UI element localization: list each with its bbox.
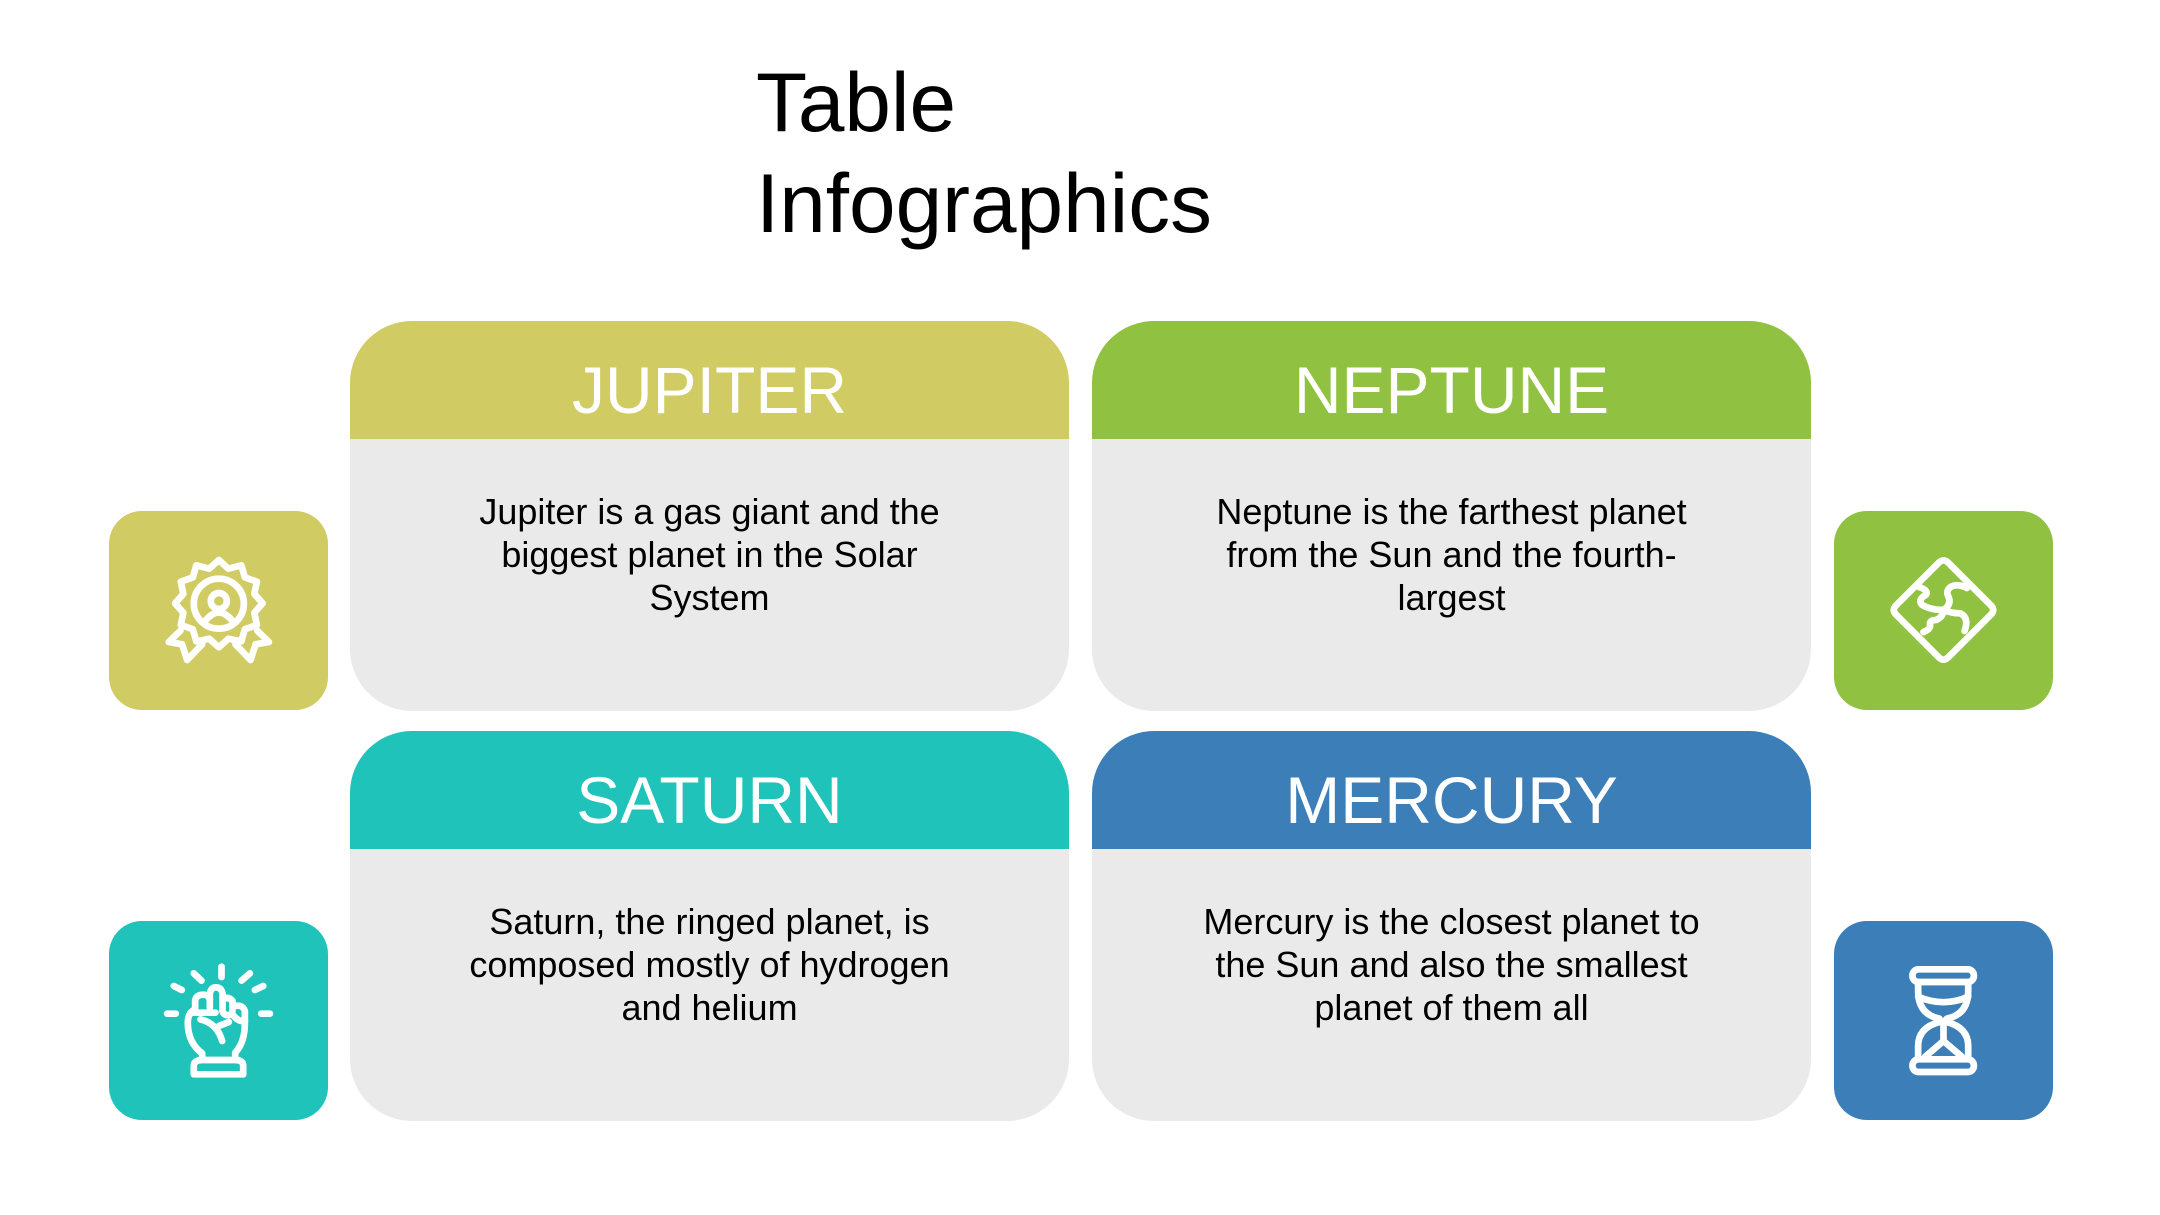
panel: Neptune <box>1092 321 1811 711</box>
panel: Jupiter <box>350 321 1069 711</box>
heading: Neptune: NEPTUNE <box>1294 353 1609 427</box>
text: Neptune description <box>1216 490 1687 618</box>
icon: award badge <box>109 511 328 710</box>
text: Neptune description: Neptune is the farthest planet <box>1216 490 1687 532</box>
heading: Jupiter: JUPITER <box>572 353 847 427</box>
heading: Saturn <box>350 731 1069 849</box>
icon: raised fist <box>109 921 328 1120</box>
text: Mercury description <box>1203 900 1700 1028</box>
title: Table <box>756 55 956 149</box>
title: Infographics <box>756 156 1212 250</box>
panel: Mercury <box>1092 731 1811 1121</box>
title <box>756 55 1212 250</box>
heading: Jupiter <box>350 321 1069 439</box>
text: Neptune description: from the Sun and the fourth- <box>1226 534 1677 575</box>
icon: puzzle <box>1834 511 2053 710</box>
text: Jupiter description: System <box>649 577 770 618</box>
text: Saturn description: and helium <box>621 987 798 1028</box>
text: Saturn description: composed mostly of hydrogen <box>469 944 950 985</box>
heading: Mercury <box>1092 731 1811 849</box>
heading: Saturn: SATURN <box>576 763 843 837</box>
text: Saturn description: Saturn, the ringed planet, is <box>489 900 930 942</box>
panel: Saturn <box>350 731 1069 1121</box>
text: Mercury description: planet of them all <box>1314 987 1589 1028</box>
text: Jupiter description: biggest planet in the Solar <box>501 534 918 575</box>
text: Neptune description: largest <box>1397 577 1506 618</box>
heading: Mercury: MERCURY <box>1285 763 1618 837</box>
icon: hourglass <box>1834 921 2053 1120</box>
text: Jupiter description <box>479 490 940 618</box>
heading: Neptune <box>1092 321 1811 439</box>
text: Saturn description <box>469 900 950 1028</box>
text: Jupiter description: Jupiter is a gas giant and the <box>479 490 940 532</box>
text: Mercury description: Mercury is the closest planet to <box>1203 900 1700 942</box>
text: Mercury description: the Sun and also the smallest <box>1215 944 1688 985</box>
